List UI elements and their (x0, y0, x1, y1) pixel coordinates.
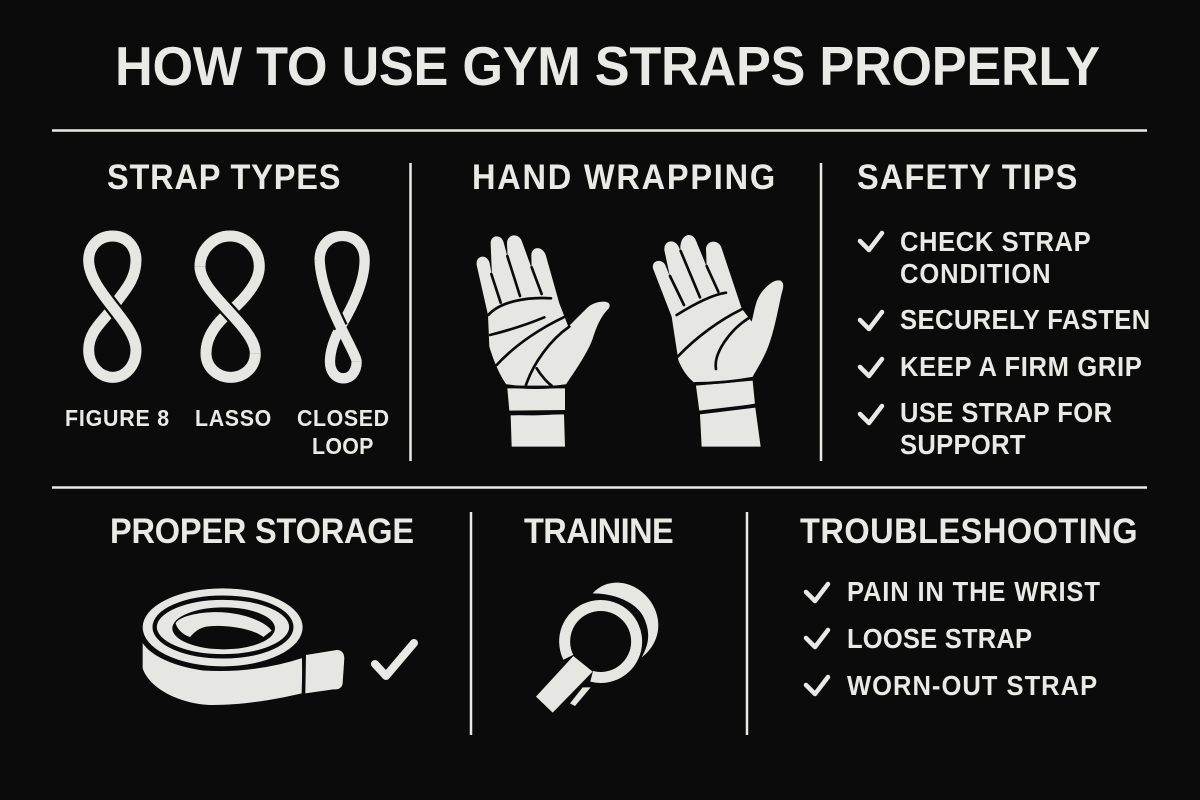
list item: use strap for support (860, 397, 1112, 460)
list item: keep a firm grip: KEEP A FIRM GRIP (900, 351, 1142, 382)
icon: wrapped right hand (653, 235, 783, 447)
icon: lasso strap (200, 236, 259, 377)
list item: check strap condition: CONDITION (900, 258, 1051, 289)
label: closed loop: LOOP (312, 433, 374, 459)
label: closed loop: CLOSED (297, 405, 389, 431)
list item: pain in the wrist: PAIN IN THE WRIST (847, 576, 1100, 607)
title: HOW TO USE GYM STRAPS PROPERLY (115, 36, 1100, 97)
panel: safety tips (857, 158, 1150, 460)
panel: proper storage (110, 512, 414, 705)
icon: closed loop strap (320, 236, 365, 378)
list item: check strap condition: CHECK STRAP (900, 226, 1091, 257)
panel: troubleshooting (800, 512, 1138, 701)
label: lasso: LASSO (195, 405, 271, 431)
list item: check strap condition (860, 226, 1091, 289)
label: closed loop (297, 405, 389, 459)
heading: troubleshooting: TROUBLESHOOTING (800, 512, 1138, 551)
icon: strap ring with handle (536, 583, 658, 713)
icon: rolled strap (142, 588, 344, 705)
label: figure 8: FIGURE 8 (65, 405, 169, 431)
panel: strap types (65, 158, 389, 459)
icon: figure 8 strap (89, 236, 136, 377)
list item: loose strap: LOOSE STRAP (847, 623, 1032, 654)
heading: hand wrapping: HAND WRAPPING (472, 158, 775, 197)
list item: securely fasten: SECURELY FASTEN (900, 304, 1150, 335)
heading: strap types: STRAP TYPES (107, 158, 340, 197)
list item: worn-out strap: WORN-OUT STRAP (847, 670, 1097, 701)
heading: proper storage: PROPER STORAGE (110, 512, 414, 551)
list item: use strap for support: USE STRAP FOR (900, 397, 1112, 428)
panel: hand wrapping (472, 158, 783, 447)
list item: use strap for support: SUPPORT (900, 429, 1026, 460)
panel: training (524, 512, 674, 713)
heading: trainine: TRAININE (524, 512, 674, 551)
heading: safety tips: SAFETY TIPS (857, 158, 1077, 197)
icon: wrapped left hand (477, 235, 610, 447)
icon: check mark (375, 643, 414, 676)
